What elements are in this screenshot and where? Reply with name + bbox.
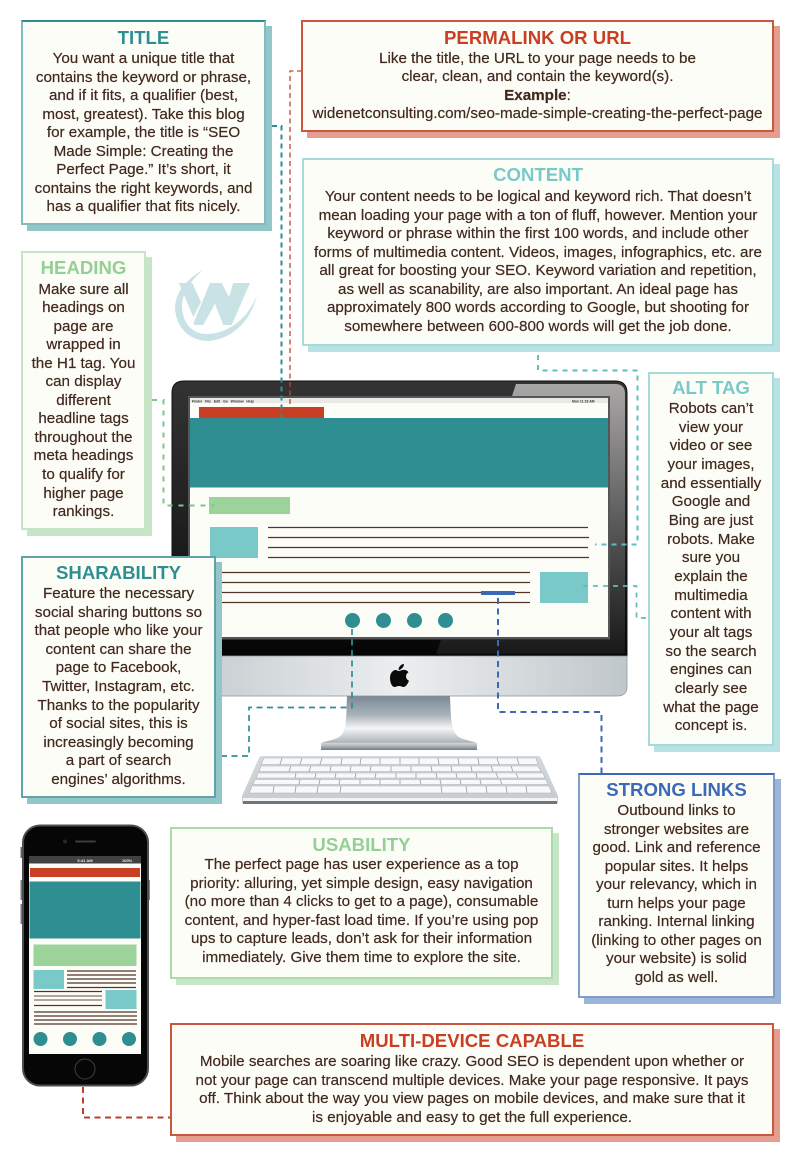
desktop computer	[172, 381, 627, 804]
connector: title	[272, 126, 282, 432]
panel: heading	[21, 251, 146, 530]
text: content: approximately 800 words according to Google, but shooting for	[327, 299, 749, 316]
text: multi-device capable	[196, 1053, 748, 1126]
connector: strong links	[498, 598, 602, 773]
phone screen: 100%	[122, 858, 133, 863]
text: alt tag: your images,	[668, 456, 754, 473]
connector: permalink	[290, 71, 302, 412]
heading: content: CONTENT	[493, 164, 583, 185]
text: usability	[185, 856, 538, 966]
text: strong links: your relevancy, which in	[596, 876, 757, 893]
text: alt tag: so the search	[665, 643, 757, 660]
text: sharability: that people who like your	[34, 622, 202, 639]
monitor chin	[172, 656, 627, 696]
panel: multi-device capable	[170, 1023, 774, 1136]
text: alt tag: concept is.	[675, 717, 747, 734]
text: heading: meta headings	[34, 447, 133, 464]
text: content: as well as scanability, are also important. An ideal page has	[338, 281, 738, 298]
phone screen: 9:41 AM	[77, 858, 93, 863]
text: title: most, greatest). Take this blog	[42, 106, 245, 123]
text: title: has a qualifier that fits nicely.	[47, 198, 240, 215]
text: alt tag: multimedia	[674, 587, 748, 604]
heading: usability: USABILITY	[312, 834, 411, 855]
text: heading: page are	[54, 318, 113, 335]
text: heading: headline tags	[38, 410, 129, 427]
text: title	[35, 50, 252, 215]
text: heading: can display	[46, 373, 121, 390]
text: alt tag: engines can	[670, 661, 752, 678]
text: multi-device capable: is enjoyable and easy to get the full experience.	[312, 1109, 632, 1126]
header bar	[199, 407, 324, 418]
text: multi-device capable: off. Think about the way you view pages on mobile devices, and make sure that it	[199, 1090, 745, 1107]
text: content: all great for boosting your SEO. Keyword variation and repetition,	[319, 262, 757, 279]
text: alt tag: what the page	[663, 698, 759, 716]
text: heading: rankings.	[53, 503, 114, 520]
text: alt tag: view your	[679, 419, 743, 436]
phone screen	[29, 856, 141, 1054]
text: multi-device capable: Mobile searches are soaring like crazy. Good SEO is dependent upon whether or	[200, 1053, 744, 1070]
heading: multi-device capable: MULTI-DEVICE CAPABLE	[360, 1030, 584, 1051]
text: title: Made Simple: Creating the	[54, 143, 233, 160]
smartphone	[20, 826, 150, 1086]
text: permalink: widenetconsulting.com/seo-made-simple-creating-the-perfect-page	[313, 105, 762, 122]
text: content: somewhere between 600-800 words will get the job done.	[344, 318, 732, 335]
text: alt tag: clearly see	[675, 680, 747, 697]
text: strong links: Outbound links to	[617, 802, 736, 819]
text: permalink: Like the title, the URL to your page needs to be	[379, 50, 696, 66]
text: strong links	[591, 802, 762, 986]
text: alt tag: Google and	[672, 493, 750, 510]
panel: title	[21, 20, 266, 225]
text: permalink: Example:	[504, 87, 571, 104]
text: title: for example, the title is “SEO	[47, 124, 240, 141]
text: heading: higher page	[43, 485, 124, 502]
text: usability: (no more than 4 clicks to get to a page), consumable	[185, 893, 538, 910]
panel: permalink	[301, 20, 774, 132]
connector: heading	[152, 400, 214, 506]
panel: sharability	[21, 556, 216, 798]
text: strong links: stronger websites are	[604, 821, 749, 838]
heading: strong links: STRONG LINKS	[606, 779, 747, 800]
apple logo	[390, 664, 409, 687]
text: sharability: of social sites, this is	[49, 715, 188, 732]
text: content	[314, 188, 762, 335]
text: sharability	[34, 585, 202, 788]
text: sharability: page to Facebook,	[56, 659, 181, 676]
text: heading: wrapped in	[46, 336, 121, 353]
connector: alt tag	[583, 586, 648, 618]
text: alt tag: video or see	[670, 437, 752, 454]
text: strong links: turn helps your page	[607, 895, 746, 912]
text: title: contains the right keywords, and	[35, 180, 252, 197]
text: alt tag: explain the	[674, 568, 748, 585]
logo: W mark	[175, 270, 257, 341]
monitor screen	[188, 396, 610, 640]
text: alt tag	[661, 400, 762, 734]
panel: alt tag	[648, 372, 774, 746]
panel: usability	[170, 827, 553, 979]
text: permalink: clear, clean, and contain the keyword(s).	[402, 68, 673, 85]
text: heading	[32, 280, 135, 520]
text: strong links: ranking. Internal linking	[598, 913, 755, 930]
connector: sharability	[221, 622, 352, 756]
text: alt tag: Robots can’t	[669, 400, 753, 417]
text: sharability: increasingly becoming	[43, 734, 194, 751]
monitor screen: Mon 11:18 AM	[572, 400, 595, 404]
text: strong links: your website) is solid	[606, 950, 747, 967]
text: title: contains the keyword or phrase,	[36, 69, 251, 86]
text: strong links: good. Link and reference	[592, 839, 761, 856]
text: heading: different	[56, 392, 111, 409]
hero band	[190, 418, 608, 488]
monitor screen: Finder File Edit Go Window Help	[192, 400, 254, 404]
text: sharability: social sharing buttons so	[35, 604, 202, 621]
text: alt tag: Bing are just	[669, 512, 753, 529]
text: alt tag: robots. Make	[667, 531, 755, 548]
text: strong links: gold as well.	[635, 969, 718, 986]
text: title: You want a unique title that	[53, 50, 234, 67]
heading: heading: HEADING	[41, 257, 126, 278]
strong link mark	[481, 591, 515, 595]
heading: sharability: SHARABILITY	[56, 562, 181, 583]
text: multi-device capable: not your page can transcend multiple devices. Make your page responsive. It pays	[196, 1072, 748, 1089]
text: heading: to qualify for	[42, 466, 125, 483]
heading: title: TITLE	[118, 27, 169, 48]
text: content: keyword or phrase within the first 100 words, and include other	[327, 225, 749, 242]
text: sharability: engines’ algorithms.	[51, 771, 186, 788]
text: strong links: popular sites. It helps	[605, 858, 748, 875]
share buttons	[345, 613, 453, 628]
monitor stand	[321, 696, 477, 750]
text: permalink	[312, 50, 762, 122]
text: alt tag: and essentially	[661, 475, 761, 492]
text: title: and if it fits, a qualifier (best,	[49, 87, 238, 104]
text: heading: Make sure all	[38, 280, 129, 298]
text: sharability: Twitter, Instagram, etc.	[42, 678, 195, 695]
text: usability: priority: alluring, yet simple design, easy navigation	[190, 875, 533, 892]
text: content: mean loading your page with a ton of fluff, however. Mention your	[319, 207, 757, 224]
text: usability: immediately. Give them time to explore the site.	[202, 949, 521, 966]
text: content: forms of multimedia content. Videos, images, infographics, etc. are	[314, 244, 762, 261]
connector: content	[538, 345, 638, 544]
text: heading: the H1 tag. You	[32, 355, 135, 372]
panel: strong links	[578, 773, 775, 998]
text: sharability: Feature the necessary	[43, 585, 194, 602]
text lines	[215, 528, 589, 602]
text: alt tag: sure you	[682, 549, 740, 566]
text: content: Your content needs to be logical and keyword rich. That doesn’t	[325, 188, 751, 205]
monitor bezel	[172, 381, 627, 656]
image blocks	[210, 527, 588, 603]
panel: content	[302, 158, 774, 346]
text: usability: ups to capture leads, don’t ask for their information	[191, 930, 532, 947]
heading block	[209, 497, 290, 514]
text: sharability: a part of search	[66, 752, 171, 769]
text: sharability: content can share the	[45, 641, 192, 658]
text: alt tag: your alt tags	[670, 624, 752, 641]
text: heading: throughout the	[35, 429, 132, 446]
text: usability: The perfect page has user experience as a top	[204, 856, 519, 873]
heading: permalink: PERMALINK OR URL	[444, 27, 631, 48]
text: sharability: Thanks to the popularity	[37, 697, 200, 714]
text: heading: headings on	[42, 299, 125, 316]
connector: multi-device	[83, 1087, 170, 1118]
keyboard	[242, 756, 558, 804]
text: strong links: (linking to other pages on	[591, 932, 762, 949]
heading: alt tag: ALT TAG	[672, 377, 750, 398]
text: title: Perfect Page.” It’s short, it	[56, 161, 231, 178]
text: alt tag: content with	[670, 605, 752, 622]
text: usability: content, and hyper-fast load time. If you’re using pop	[185, 912, 538, 929]
